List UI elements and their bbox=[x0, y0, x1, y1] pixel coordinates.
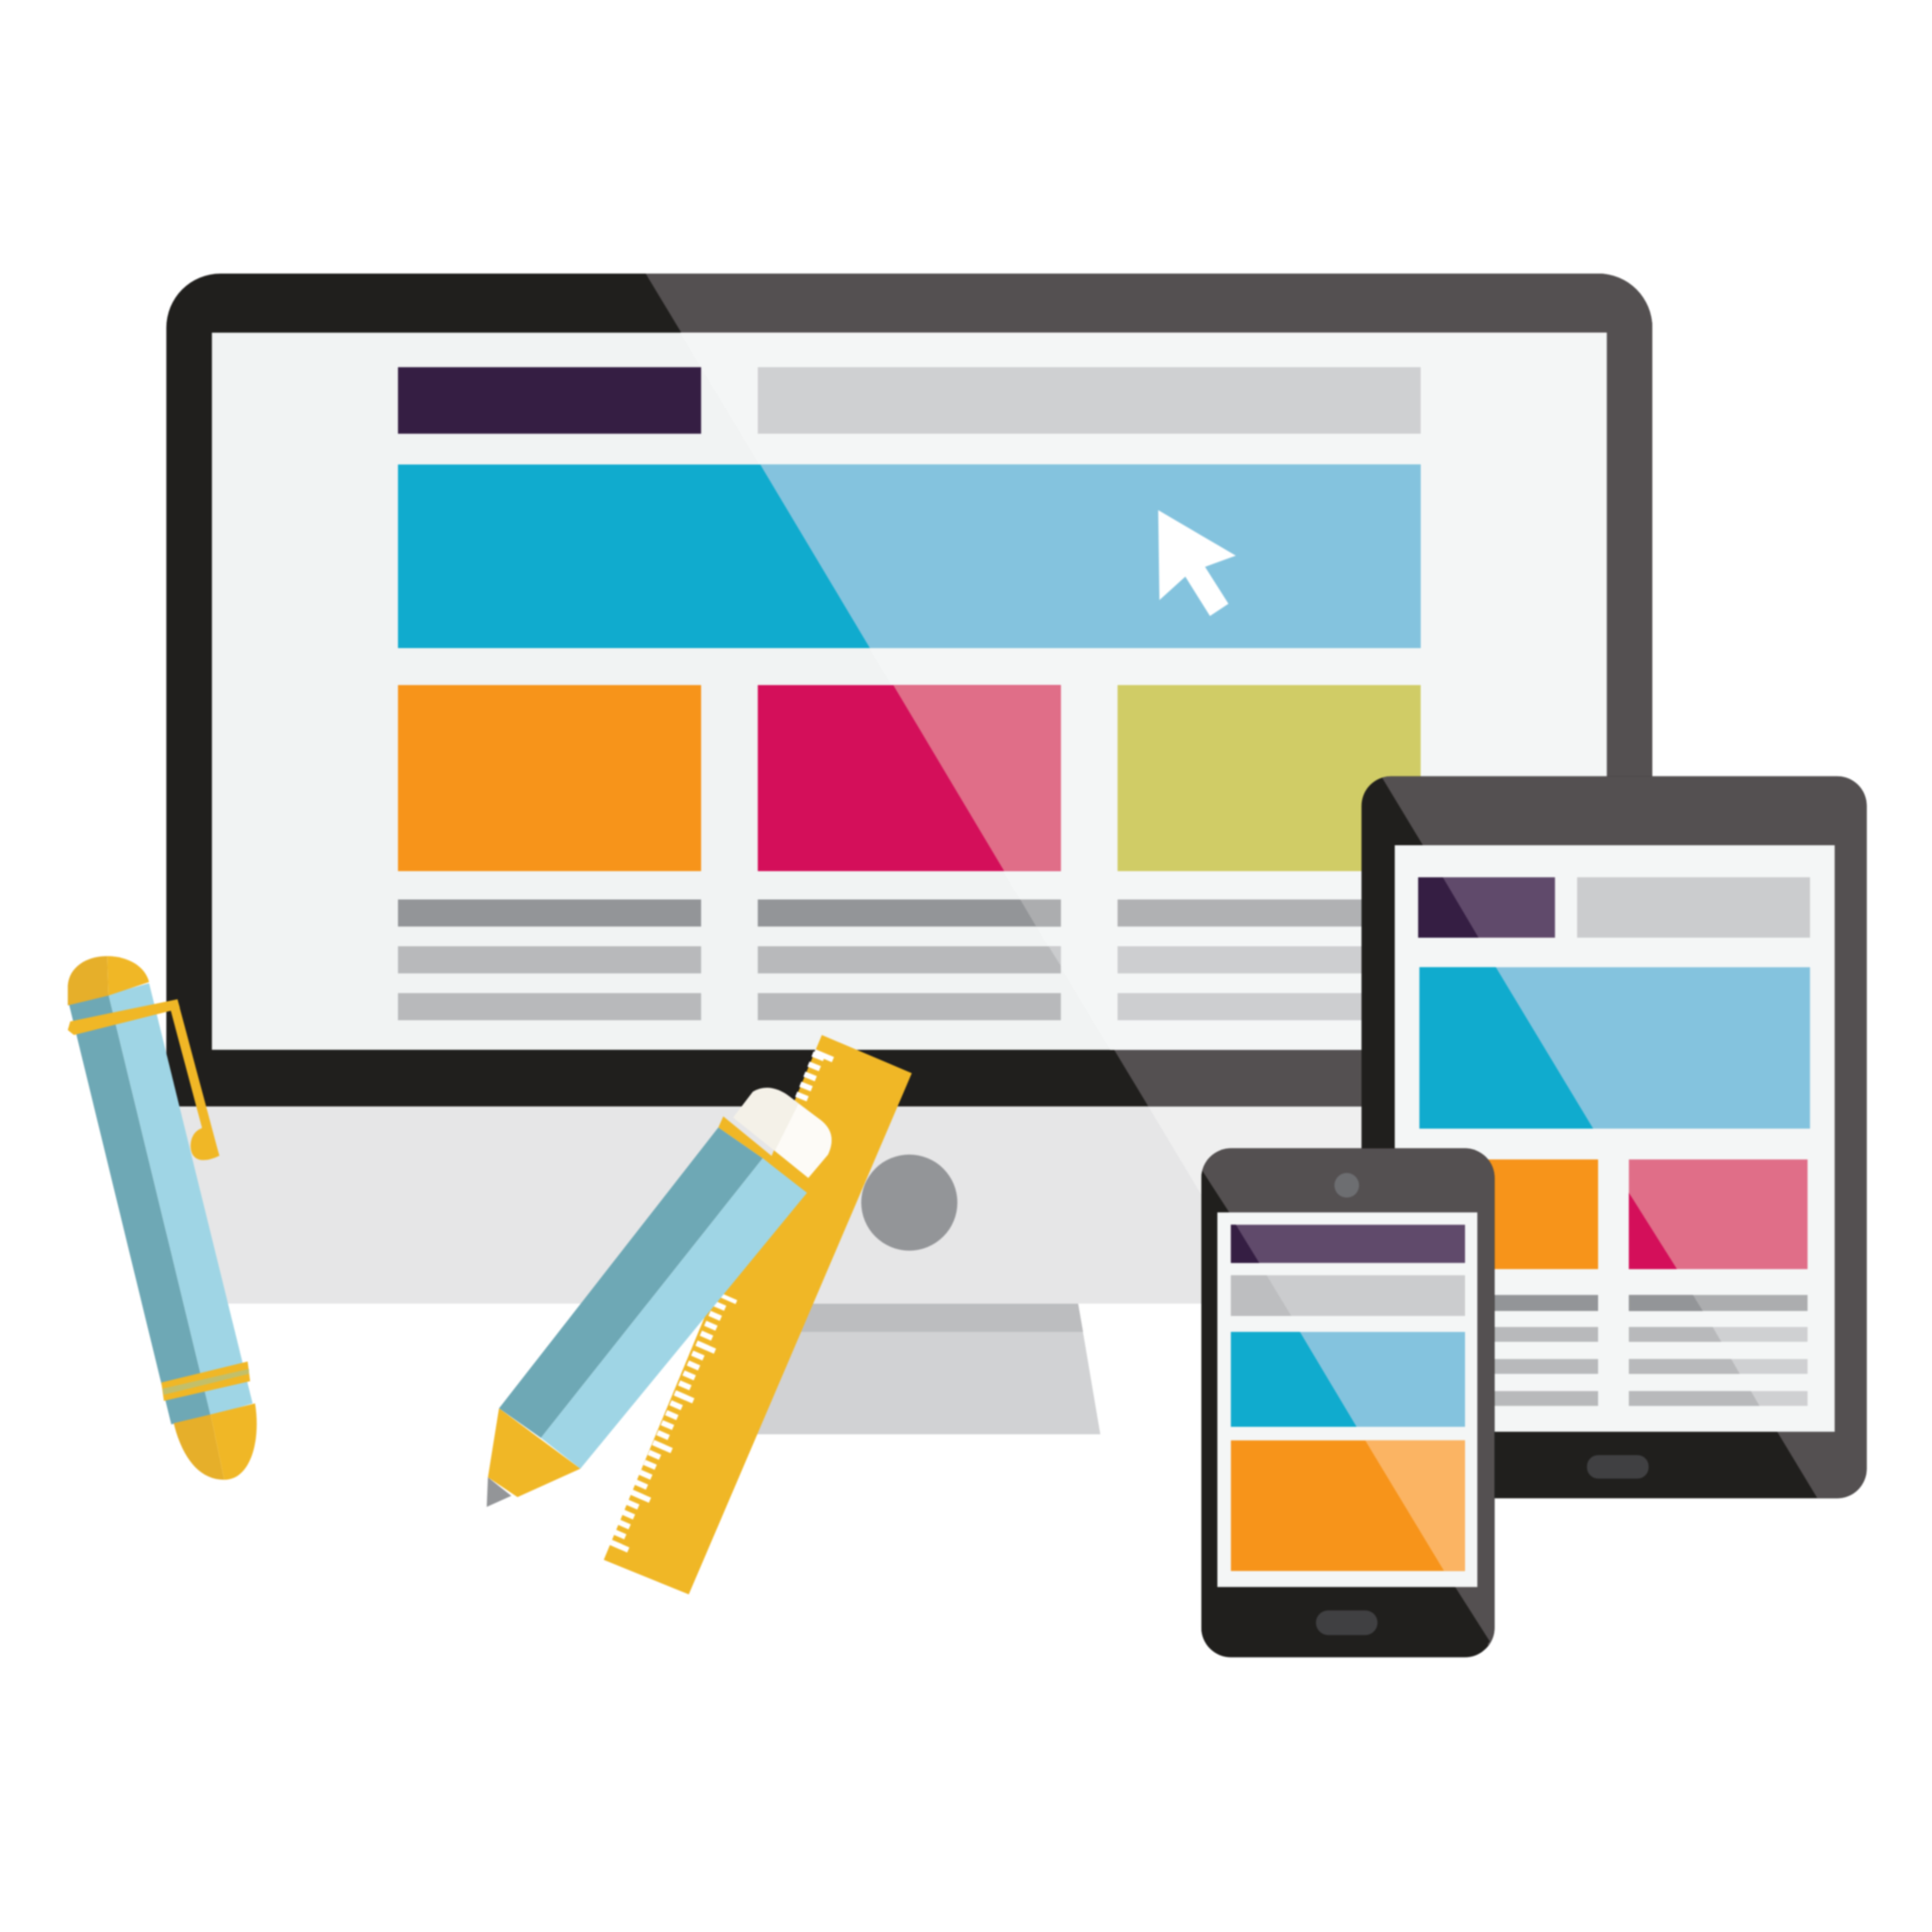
pencil ferrule bbox=[718, 1116, 812, 1192]
icon: monitor button bbox=[861, 1155, 958, 1251]
text lines column 2 bbox=[758, 899, 1061, 1020]
monitor stand bbox=[718, 1304, 1100, 1434]
ruler tick marks bbox=[614, 1052, 833, 1549]
hero banner bbox=[398, 464, 1421, 648]
phone hero bbox=[1231, 1332, 1465, 1426]
icon: mouse cursor bbox=[1158, 510, 1236, 616]
illustration: responsive devices and design tools bbox=[66, 273, 1868, 1658]
monitor chin with power button bbox=[166, 1107, 1653, 1304]
tablet pink card bbox=[1629, 1159, 1807, 1269]
phone nav bar bbox=[1231, 1275, 1465, 1316]
tablet text lines right bbox=[1629, 1295, 1807, 1406]
pencil body dark side bbox=[499, 1127, 762, 1438]
text lines column 1 bbox=[398, 899, 701, 1020]
panel: tablet screen bbox=[1395, 845, 1835, 1432]
pen bottom cap bbox=[174, 1404, 257, 1480]
pen top cap bbox=[68, 957, 149, 1006]
tablet nav block bbox=[1577, 877, 1810, 938]
tablet hero bbox=[1420, 967, 1810, 1128]
tablet text lines left bbox=[1478, 1295, 1598, 1406]
pencil body light side bbox=[541, 1158, 808, 1469]
pencil lead bbox=[487, 1477, 511, 1507]
icon: ruler bbox=[604, 1035, 912, 1594]
phone home button bbox=[1316, 1610, 1377, 1635]
pen body light side bbox=[108, 983, 253, 1416]
device: phone bbox=[1201, 1148, 1494, 1657]
olive card bbox=[1118, 685, 1421, 871]
magenta card bbox=[758, 685, 1061, 871]
orange card bbox=[398, 685, 701, 871]
pen lower band bbox=[161, 1361, 250, 1401]
icon: phone camera bbox=[1335, 1173, 1359, 1198]
pen clip bbox=[68, 999, 219, 1160]
tablet home button bbox=[1587, 1456, 1649, 1478]
icon: pen bbox=[68, 957, 257, 1480]
phone header bar bbox=[1231, 1224, 1465, 1263]
pencil tip bbox=[488, 1408, 580, 1497]
pen body dark side bbox=[69, 994, 210, 1424]
tablet logo block bbox=[1418, 877, 1555, 938]
pencil eraser bbox=[733, 1088, 832, 1178]
text lines column 3 bbox=[1118, 899, 1421, 1020]
panel: phone screen bbox=[1217, 1212, 1477, 1587]
icon: pencil bbox=[487, 1088, 832, 1507]
logo block bbox=[398, 367, 701, 434]
device: tablet bbox=[1361, 776, 1867, 1498]
panel: monitor screen bbox=[212, 333, 1607, 1050]
tablet orange card bbox=[1478, 1159, 1598, 1269]
phone orange card bbox=[1231, 1441, 1465, 1571]
navigation block bbox=[758, 367, 1421, 434]
monitor bezel bbox=[166, 274, 1653, 1107]
